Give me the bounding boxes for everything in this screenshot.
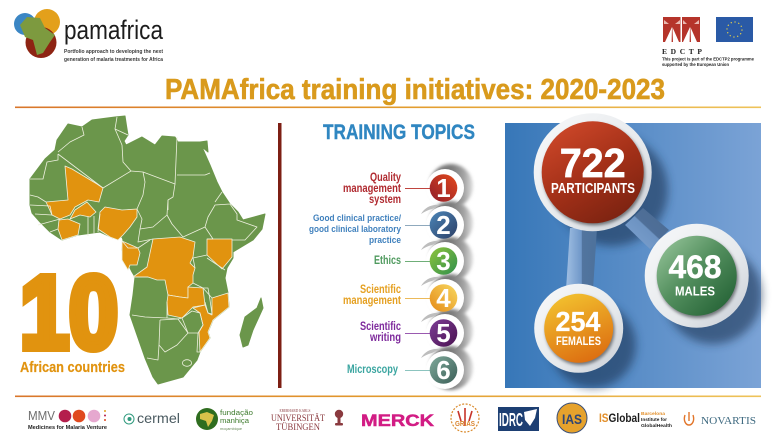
top rule: [15, 106, 761, 108]
training topics list: [309, 164, 473, 390]
topic 5: Scientific: [360, 321, 401, 333]
topic 2: 2: [436, 210, 451, 240]
topic 6: [347, 355, 457, 385]
topic 2: [309, 210, 457, 246]
males circle: 468: [668, 249, 722, 285]
logo: Merck: MERCK: [361, 411, 435, 430]
logo: ISGlobal: GlobalHealth: [641, 423, 672, 428]
EDCTP statement: [662, 56, 755, 67]
topic 1: Quality: [370, 172, 401, 184]
EDCTP statement: supported by the European Union: [662, 62, 729, 67]
logo: Universitat Tubingen: [271, 409, 343, 432]
connector males: [625, 208, 669, 249]
logo: IAS: [557, 403, 587, 433]
EDCTP logo block: [662, 17, 755, 67]
logo: ISGlobal: ISGlobal: [599, 411, 640, 425]
logo: fundacao manhica: fundação: [220, 410, 253, 417]
continent: [30, 116, 265, 384]
panel background: [505, 123, 761, 388]
logo: MMV: Medicines for Malaria Venture: [28, 425, 107, 431]
logo tagline: Portfolio approach to developing the next: [64, 49, 163, 55]
topic 1: system: [369, 194, 401, 206]
title: PAMAfrica training initiatives: 2020-2023: [165, 74, 665, 106]
EDCTP statement: This project is part of the EDCTP2 programme: [662, 56, 755, 62]
logo tagline: [64, 49, 164, 63]
EDCTP name: EDCTP: [662, 47, 702, 56]
connector females: [566, 228, 597, 290]
topic 1: management: [343, 183, 401, 195]
topic 5: writing: [369, 332, 401, 344]
logo: Novartis: NOVARTIS: [701, 415, 756, 427]
topic 6: 6: [436, 355, 451, 385]
males circle: [645, 224, 749, 328]
logo: ISGlobal: Institute for: [641, 417, 667, 422]
logo: GRIAS: GRIAS: [455, 421, 475, 428]
logo emblem: [14, 9, 60, 58]
females circle: FEMALES: [556, 334, 601, 348]
partner logos: [28, 403, 756, 433]
total participants circle: [534, 113, 652, 231]
logo: MMV: MMV: [28, 408, 55, 423]
logo tagline: generation of malaria treatments for Africa: [64, 57, 164, 63]
topic 4: [343, 283, 457, 313]
topic 2: Good clinical practice/: [313, 213, 401, 224]
bottom rule: [15, 396, 761, 397]
logo wordmark: pamafrica: [64, 15, 164, 45]
total participants circle: 722: [560, 140, 626, 186]
pamafrica logo: [14, 9, 164, 63]
topic swirl shadows: [421, 164, 473, 390]
females circle: [534, 284, 623, 373]
topic 2: practice: [369, 235, 401, 246]
logo: Novartis: [684, 412, 756, 427]
EU flag: [716, 17, 753, 42]
topic 4: 4: [436, 283, 451, 313]
topic 4: Scientific: [360, 284, 401, 296]
logo: fundacao manhica: manhiça: [220, 418, 249, 425]
training topics heading: TRAINING TOPICS: [323, 120, 475, 144]
topic 6: Microscopy: [347, 364, 398, 376]
participants panel: [505, 113, 762, 388]
topic 5: [360, 318, 457, 348]
EDCTP figures: [663, 17, 700, 42]
circle shadows: [550, 134, 762, 388]
topic 3: [374, 246, 457, 276]
african countries caption: African countries: [20, 359, 125, 376]
vertical divider: [278, 123, 282, 388]
highlighted countries: [46, 166, 232, 352]
logo: MMV: [28, 408, 107, 431]
logo: IDRC: IDRC: [499, 410, 523, 430]
country borders: [30, 117, 257, 366]
logo: fundacao manhica: moçambique: [220, 427, 242, 431]
logo: cermel: cermel: [137, 410, 180, 426]
africa map: [30, 116, 265, 384]
madagascar: [240, 298, 263, 347]
logo: Universitat Tubingen: UNIVERSITÄT: [271, 413, 325, 423]
logo: Universitat Tubingen: EBERHARD KARLS: [280, 409, 310, 413]
females circle: 254: [556, 306, 601, 337]
topic 1: [343, 172, 457, 206]
logo: ISGlobal: Barcelona: [641, 411, 665, 416]
topic 5: 5: [436, 318, 451, 348]
topic 3: Ethics: [374, 255, 401, 267]
topic 4: management: [343, 295, 401, 307]
total participants circle: PARTICIPANTS: [551, 181, 635, 197]
big number 10: 10: [20, 255, 118, 370]
topic 3: 3: [436, 246, 451, 276]
logo: Universitat Tubingen: TÜBINGEN: [276, 422, 320, 432]
males circle: MALES: [675, 284, 715, 298]
logo: IAS: IAS: [562, 411, 582, 427]
logo: GRIAS: [451, 404, 479, 432]
topic 2: good clinical laboratory: [309, 224, 402, 235]
logo: fundacao manhica: [196, 408, 253, 431]
topic 1: 1: [436, 173, 451, 203]
logo: ISGlobal: [599, 411, 672, 428]
